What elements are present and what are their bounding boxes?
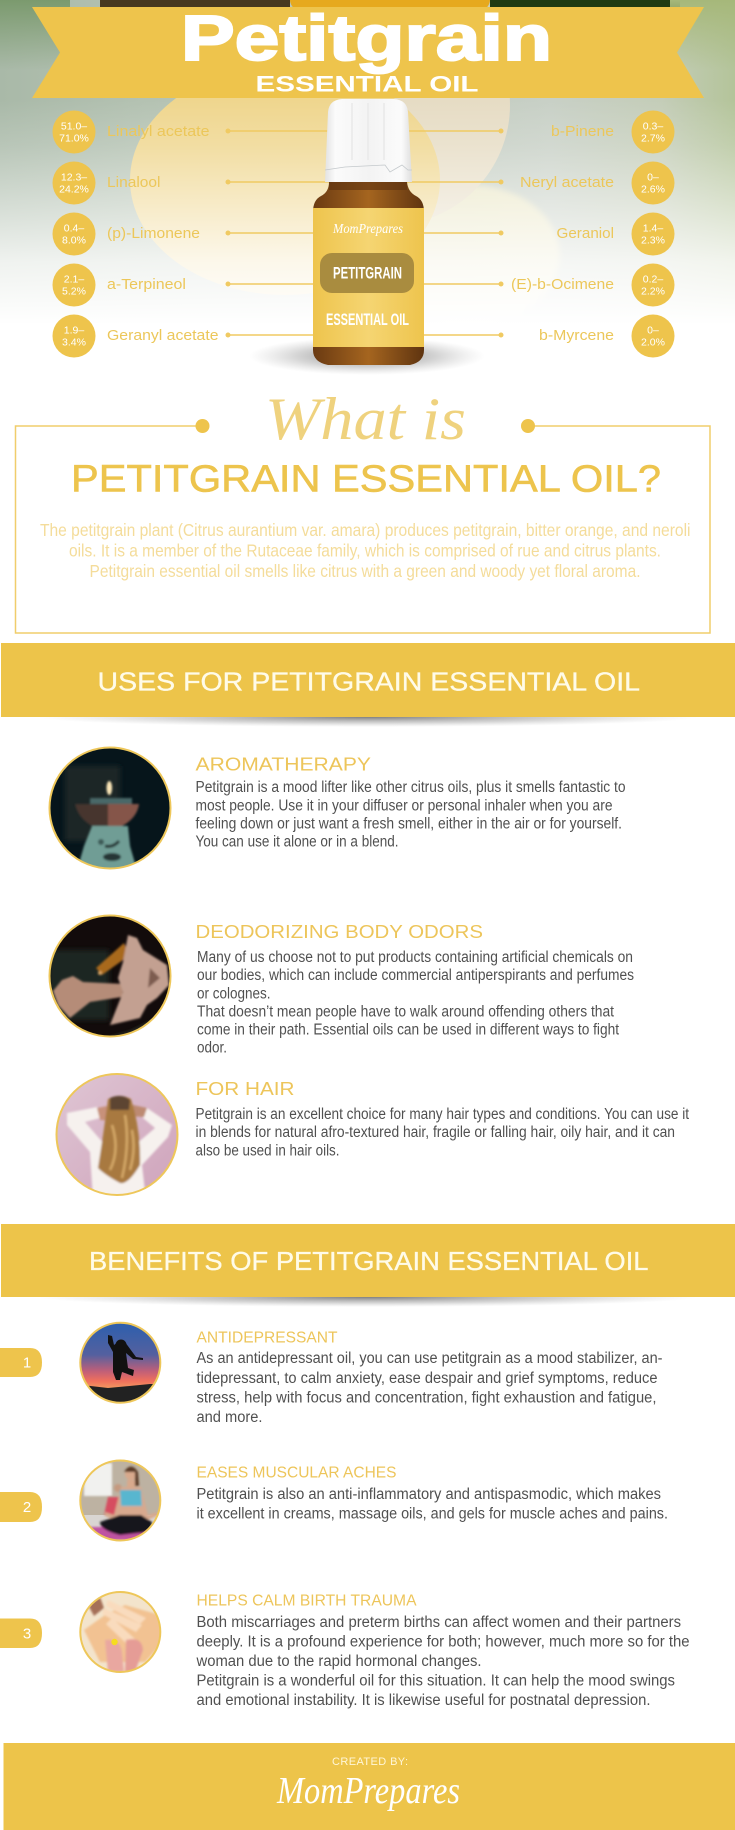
antidepressant text: As an antidepressant oil, you can use petitgrain as a mood stabilizer, an- bbox=[196, 1350, 662, 1367]
bottle illustration: MomPrepares bbox=[332, 222, 403, 237]
number tag 1: 1 bbox=[23, 1354, 31, 1372]
for hair text: FOR HAIR bbox=[196, 1078, 294, 1099]
for hair text bbox=[196, 1078, 690, 1159]
right constituents: b-Myrcene bbox=[539, 328, 614, 344]
muscular aches text: it excellent in creams, massage oils, and gels for muscle aches and pains. bbox=[196, 1505, 668, 1522]
benefits band bbox=[1, 1224, 735, 1307]
brand logo: MomPrepares bbox=[276, 1770, 460, 1812]
right constituents: Neryl acetate bbox=[520, 175, 614, 191]
benefits heading: BENEFITS OF PETITGRAIN ESSENTIAL OIL bbox=[89, 1246, 648, 1276]
deodorizing text: Many of us choose not to put products containing artificial chemicals on bbox=[197, 949, 633, 966]
right constituents: 0– bbox=[647, 324, 659, 336]
panel: what is bbox=[16, 419, 710, 633]
birth trauma text: deeply. It is a profound experience for both; however, much more so for the bbox=[196, 1634, 690, 1650]
intro paragraph bbox=[40, 520, 690, 581]
left constituents: Linalyl acetate bbox=[107, 124, 210, 140]
birth trauma text: woman due to the rapid hormonal changes. bbox=[196, 1653, 482, 1670]
deodorizing text bbox=[196, 921, 634, 1057]
intro paragraph: Petitgrain essential oil smells like citrus with a green and woody yet floral aroma. bbox=[90, 561, 640, 581]
deodorizing text: come in their path. Essential oils can be used in different ways to fight bbox=[197, 1022, 620, 1039]
photo: jumping silhouette at sunset bbox=[75, 1322, 165, 1405]
for hair text: in blends for natural afro-textured hair, fragile or falling hair, oily hair, and it can bbox=[196, 1124, 675, 1141]
bottle illustration bbox=[249, 99, 485, 375]
left constituents: 5.2% bbox=[62, 286, 86, 298]
left constituents: 1.9– bbox=[64, 324, 84, 336]
photo: yoga woman bbox=[80, 1460, 161, 1542]
left constituents bbox=[52, 110, 218, 358]
right constituents: 2.0% bbox=[641, 336, 665, 348]
right constituents: 0.2– bbox=[643, 274, 663, 286]
main heading: PETITGRAIN ESSENTIAL OIL? bbox=[71, 459, 661, 501]
aromatherapy text: most people. Use it in your diffuser or personal inhaler when you are bbox=[196, 798, 612, 814]
antidepressant text bbox=[196, 1330, 662, 1426]
deodorizing text: our bodies, which can include commercial antiperspirants and perfumes bbox=[197, 967, 634, 984]
right constituents: 0– bbox=[647, 172, 659, 184]
aromatherapy text: You can use it alone or in a blend. bbox=[196, 834, 398, 851]
bottle illustration: ESSENTIAL OIL bbox=[326, 310, 409, 329]
deodorizing text: DEODORIZING BODY ODORS bbox=[196, 921, 483, 942]
title: Petitgrain bbox=[181, 2, 552, 74]
birth trauma text: Petitgrain is a wonderful oil for this situation. It can help the mood swings bbox=[196, 1673, 675, 1690]
frame dots bbox=[196, 419, 535, 433]
background photo: citrus and leaves bbox=[0, 0, 735, 332]
number tag 2: 2 bbox=[23, 1499, 31, 1516]
script heading: What is bbox=[265, 386, 466, 452]
muscular aches text: EASES MUSCULAR ACHES bbox=[196, 1464, 396, 1481]
muscular aches text: Petitgrain is also an anti-inflammatory and antispasmodic, which makes bbox=[196, 1486, 661, 1503]
number tag 2 bbox=[0, 1492, 42, 1522]
number tag 3 bbox=[0, 1618, 42, 1648]
muscular aches text bbox=[196, 1464, 668, 1522]
right constituents: (E)-b-Ocimene bbox=[511, 277, 614, 293]
left constituents: 8.0% bbox=[62, 234, 86, 246]
birth trauma text: and emotional instability. It is likewise useful for postnatal depression. bbox=[196, 1692, 650, 1709]
subtitle: ESSENTIAL OIL bbox=[256, 72, 478, 97]
right constituents: 2.2% bbox=[641, 286, 665, 298]
right constituents bbox=[511, 110, 674, 358]
right constituents: 2.3% bbox=[641, 234, 665, 246]
right constituents: 0.3– bbox=[643, 120, 663, 132]
antidepressant text: stress, help with focus and concentration, fight exhaustion and fatigue, bbox=[196, 1390, 656, 1407]
birth trauma text: Both miscarriages and preterm births can affect women and their partners bbox=[196, 1614, 681, 1631]
photo: oil dropper hands bbox=[49, 915, 171, 1040]
deodorizing text: That doesn’t mean people have to walk around offending others that bbox=[197, 1004, 615, 1021]
footer bbox=[4, 1743, 735, 1830]
left constituents: Geranyl acetate bbox=[107, 328, 218, 344]
right constituents: b-Pinene bbox=[551, 124, 614, 140]
left constituents: 51.0– bbox=[61, 120, 87, 132]
aromatherapy text bbox=[196, 754, 626, 851]
right constituents: Geraniol bbox=[556, 226, 614, 242]
created by: CREATED BY: bbox=[332, 1756, 408, 1768]
uses band bbox=[1, 643, 735, 727]
ribbon banner bbox=[32, 2, 704, 98]
left constituents: a-Terpineol bbox=[107, 277, 186, 293]
birth trauma text bbox=[196, 1592, 690, 1709]
deodorizing text: or colognes. bbox=[197, 985, 270, 1002]
antidepressant text: tidepressant, to calm anxiety, ease despair and grief symptoms, reduce bbox=[196, 1370, 658, 1387]
right constituents: 2.7% bbox=[641, 132, 665, 144]
birth trauma text: HELPS CALM BIRTH TRAUMA bbox=[196, 1592, 417, 1609]
deodorizing text: odor. bbox=[197, 1040, 227, 1057]
left constituents: 2.1– bbox=[64, 274, 84, 286]
for hair text: also be used in hair oils. bbox=[196, 1142, 340, 1159]
bottle illustration: PETITGRAIN bbox=[333, 264, 402, 282]
right constituents: 1.4– bbox=[643, 222, 663, 234]
left constituents: 0.4– bbox=[64, 222, 84, 234]
connector lines bbox=[226, 128, 504, 338]
left constituents: (p)-Limonene bbox=[107, 226, 200, 242]
photo: hands holding baby feet bbox=[80, 1592, 165, 1673]
number tag 1 bbox=[0, 1348, 42, 1377]
right constituents: 2.6% bbox=[641, 184, 665, 196]
aromatherapy text: AROMATHERAPY bbox=[196, 754, 371, 775]
antidepressant text: ANTIDEPRESSANT bbox=[196, 1330, 338, 1346]
left constituents: Linalool bbox=[107, 175, 160, 191]
aromatherapy text: feeling down or just want a fresh smell, either in the air or for yourself. bbox=[196, 816, 622, 833]
antidepressant text: and more. bbox=[196, 1409, 262, 1426]
photo: woman with long hair bbox=[56, 1073, 178, 1200]
left constituents: 3.4% bbox=[62, 336, 86, 348]
photo: candle diffuser bbox=[49, 747, 171, 870]
uses heading: USES FOR PETITGRAIN ESSENTIAL OIL bbox=[98, 667, 640, 697]
number tag 3: 3 bbox=[23, 1626, 31, 1642]
intro paragraph: oils. It is a member of the Rutaceae family, which is comprised of rue and citrus plants. bbox=[69, 540, 661, 560]
aromatherapy text: Petitgrain is a mood lifter like other citrus oils, plus it smells fantastic to bbox=[196, 779, 626, 796]
left constituents: 12.3– bbox=[61, 172, 87, 184]
left constituents: 24.2% bbox=[59, 184, 89, 196]
left constituents: 71.0% bbox=[59, 132, 89, 144]
